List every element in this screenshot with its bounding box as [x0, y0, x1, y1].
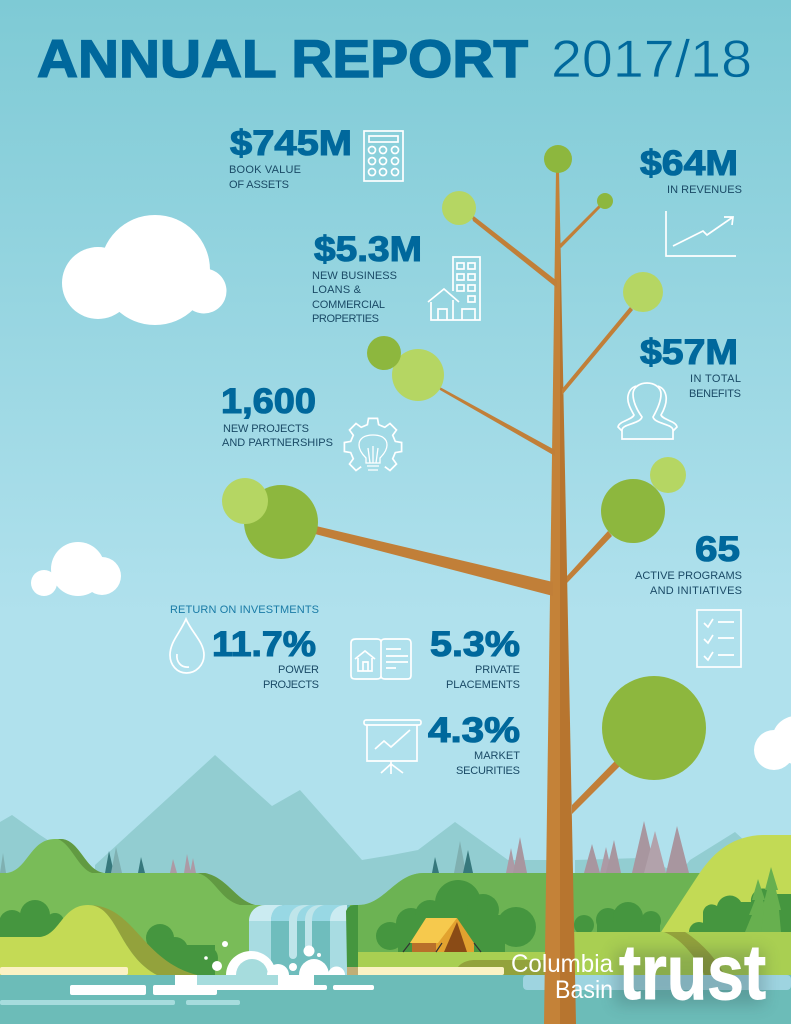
- ledge at tent: [358, 952, 548, 976]
- logo band: [523, 975, 791, 990]
- stat: revenues: IN REVENUES: [667, 184, 742, 196]
- mountains: [0, 755, 760, 910]
- icon: gear with lightbulb: [344, 418, 402, 470]
- tree foliage: [222, 145, 706, 780]
- stat: revenues: $64M: [640, 144, 738, 183]
- bushes: centre and right: [376, 880, 791, 952]
- splash: [0, 941, 374, 1005]
- stat: power projects: 11.7%: [212, 625, 316, 664]
- trees: far distance: [0, 821, 689, 873]
- logo: Columbia Basin Trust: Basin: [555, 976, 613, 1004]
- stat: active programs: 65: [695, 530, 740, 569]
- trees: green firs: [745, 867, 781, 932]
- tent: [403, 918, 481, 952]
- stat: private placements: PLACEMENTS: [446, 679, 520, 691]
- stat: private placements: [430, 625, 520, 691]
- icon: water drop: [170, 619, 204, 673]
- stat: active programs: [635, 530, 742, 597]
- stat: total benefits: IN TOTAL: [690, 373, 741, 385]
- logo shadow: [615, 950, 765, 1005]
- icon: book with house: [351, 639, 411, 679]
- bushes: left: [0, 900, 218, 975]
- cloud: small: [31, 542, 121, 596]
- icon: line chart: [666, 211, 736, 256]
- waterfall: [249, 905, 378, 975]
- hill: right yellow-green: [661, 835, 791, 932]
- logo: Columbia Basin Trust: [511, 928, 766, 1016]
- stat: business loans: LOANS &: [312, 284, 362, 296]
- stat: new projects: NEW PROJECTS: [223, 423, 309, 435]
- icon: calculator: [364, 131, 403, 181]
- stat: new projects: AND PARTNERSHIPS: [222, 437, 333, 449]
- stat: market securities: [428, 711, 520, 777]
- icon: checklist: [697, 610, 741, 667]
- stat: business loans: PROPERTIES: [312, 313, 379, 325]
- stat: business loans: [312, 230, 422, 325]
- stat: private placements: 5.3%: [430, 625, 520, 664]
- stat: market securities: 4.3%: [428, 711, 520, 750]
- stat: business loans: COMMERCIAL: [312, 299, 385, 311]
- stat: total benefits: [640, 333, 741, 400]
- cloud: right: [754, 716, 791, 770]
- return on investments heading: RETURN ON INVESTMENTS: [170, 604, 319, 616]
- tree trunk: [544, 170, 576, 1024]
- stat: new projects: 1,600: [221, 382, 316, 421]
- stat: power projects: PROJECTS: [263, 679, 319, 691]
- tree branches: [315, 205, 633, 814]
- title: 2017/18: [551, 30, 752, 89]
- water: [0, 975, 791, 1024]
- stat: market securities: MARKET: [474, 750, 520, 762]
- stat: private placements: PRIVATE: [475, 664, 520, 676]
- icon: people: [618, 383, 677, 439]
- stat: book value of assets: BOOK VALUE: [229, 164, 301, 176]
- stat: total benefits: $57M: [640, 333, 738, 372]
- title: ANNUAL REPORT: [37, 30, 528, 89]
- stat: business loans: $5.3M: [314, 230, 422, 269]
- hill: left yellow-green: [0, 905, 197, 975]
- stat: business loans: NEW BUSINESS: [312, 270, 397, 282]
- stat: revenues: [640, 144, 742, 196]
- stat: market securities: SECURITIES: [456, 765, 520, 777]
- stat: book value of assets: OF ASSETS: [229, 179, 289, 191]
- cloud: large: [62, 215, 226, 325]
- stat: book value of assets: [229, 124, 352, 191]
- stat: total benefits: BENEFITS: [689, 388, 741, 400]
- icon: buildings: [428, 257, 480, 320]
- ground strip: right: [574, 932, 791, 976]
- logo: Columbia Basin Trust: Columbia: [511, 950, 613, 978]
- logo: Columbia Basin Trust: trust: [619, 928, 766, 1016]
- stat: book value of assets: $745M: [230, 124, 352, 163]
- land: main green: [0, 839, 705, 976]
- icon: presentation screen: [364, 720, 421, 774]
- stat: new projects: [221, 382, 333, 449]
- stat: power projects: [212, 625, 319, 691]
- stat: active programs: ACTIVE PROGRAMS: [635, 570, 742, 582]
- stat: power projects: POWER: [278, 664, 319, 676]
- title: [37, 30, 752, 89]
- stat: active programs: AND INITIATIVES: [650, 585, 742, 597]
